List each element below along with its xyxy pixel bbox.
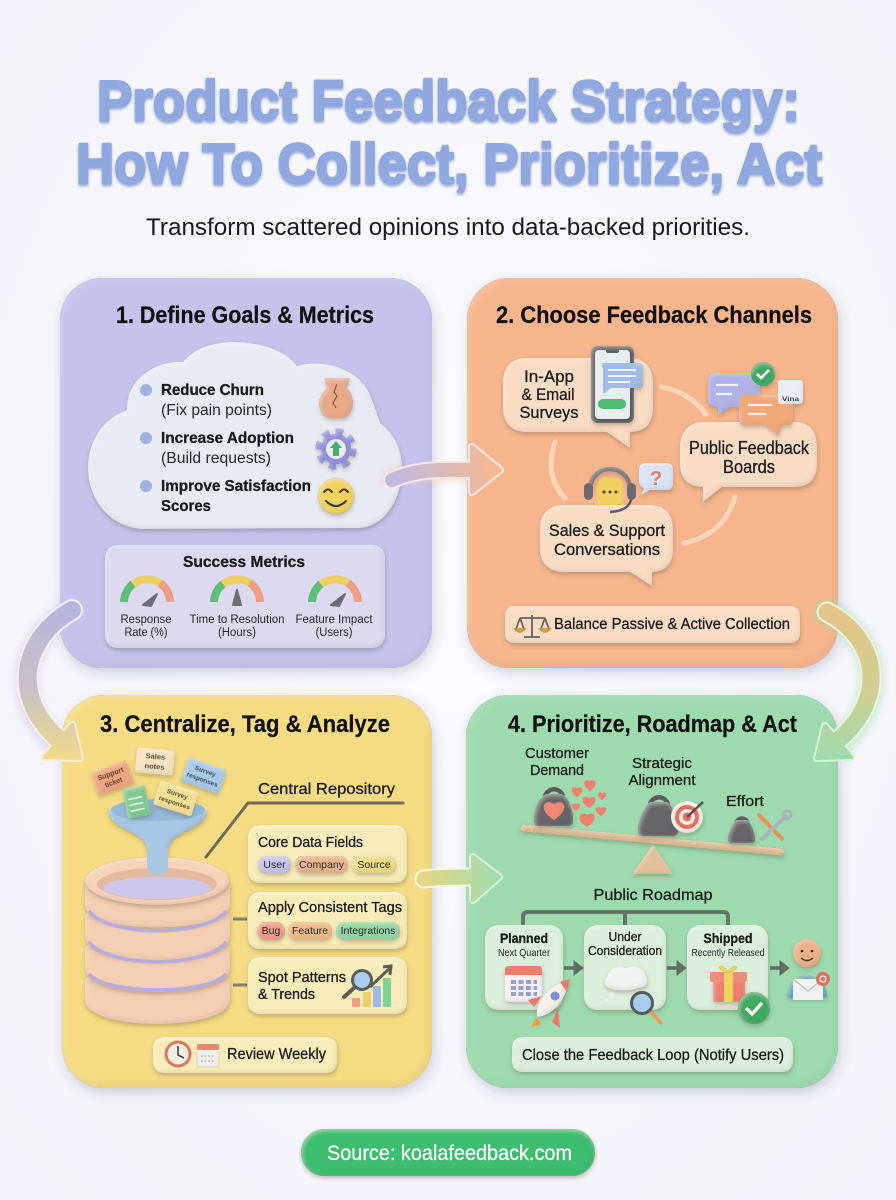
card: apply consistent tags: Integrations <box>341 925 395 937</box>
close the loop text: Close the Feedback Loop (Notify Users) <box>522 1047 784 1064</box>
bubble text: surveys: & Email <box>522 385 574 404</box>
bubble: sales and support conversations <box>540 505 673 586</box>
note: survey responses yellow: responses <box>158 795 191 812</box>
icon: question bubble: ? <box>650 468 662 490</box>
goal: improve satisfaction: Improve Satisfaction <box>161 478 311 495</box>
connector arcs <box>551 387 735 543</box>
bubble text: boards <box>689 438 810 477</box>
gauge: time to resolution <box>190 579 284 639</box>
roadmap card: planned: Planned <box>500 930 548 946</box>
card: core data fields: Company <box>299 859 345 871</box>
weight: effort with tools <box>728 811 791 843</box>
roadmap card: shipped <box>687 925 770 1024</box>
balance bar <box>505 606 800 643</box>
icon: question bubble <box>639 463 673 495</box>
card: apply consistent tags: Bug <box>262 925 280 937</box>
goal: increase adoption: Increase Adoption <box>161 430 294 447</box>
icon: board chat bubbles <box>708 362 803 435</box>
icon: user with envelope <box>787 939 830 1000</box>
arrow: channels to prioritize <box>817 612 871 758</box>
card: core data fields: Core Data Fields <box>258 835 363 851</box>
note: survey responses yellow <box>153 780 199 817</box>
bubble text: surveys <box>520 367 578 422</box>
success metrics heading: Success Metrics <box>183 554 305 571</box>
card: spot patterns and trends <box>233 957 407 1014</box>
gauge: feature impact: Feature Impact <box>296 614 373 626</box>
title <box>76 69 822 196</box>
roadmap card: under consideration: Consideration <box>588 943 662 958</box>
card: apply consistent tags: Apply Consistent Tags <box>258 900 402 916</box>
gauge: response rate <box>120 579 172 639</box>
panel 3 heading: 3. Centralize, Tag & Analyze <box>100 711 390 738</box>
gauge: time to resolution: (Hours) <box>218 627 256 639</box>
note: survey responses blue: Survey <box>194 765 217 779</box>
bubble text: surveys: In-App <box>524 367 574 386</box>
bubble text: sales: Sales & Support <box>549 521 665 540</box>
central repository label: Central Repository <box>258 781 395 798</box>
note: survey responses blue <box>181 757 227 794</box>
goal: reduce churn <box>140 382 272 419</box>
bubble text: surveys: Surveys <box>520 403 578 422</box>
icon: phone <box>591 346 643 423</box>
bubble text: sales: Conversations <box>554 540 660 559</box>
label: public roadmap: Public Roadmap <box>594 887 713 904</box>
gauge: feature impact: (Users) <box>316 627 353 639</box>
arrow: goals to channels <box>392 447 500 492</box>
thumbs-up card label: Vina <box>782 396 799 403</box>
title: How To Collect, Prioritize, Act <box>76 132 822 196</box>
panel 2: choose feedback channels <box>467 278 838 668</box>
goal: improve satisfaction: Scores <box>161 498 211 515</box>
roadmap arrows <box>564 961 789 975</box>
arrow: centralize to prioritize <box>424 857 499 900</box>
icon: rocket <box>528 979 570 1028</box>
roadmap card: shipped: Shipped <box>704 930 752 946</box>
note: sales notes <box>135 747 175 776</box>
goal: reduce churn: (Fix pain points) <box>161 402 272 419</box>
repository leader line <box>206 803 403 857</box>
roadmap card: planned <box>485 925 563 1010</box>
panel 3: centralize, tag and analyze <box>62 695 432 1088</box>
weight: customer demand with hearts <box>534 780 606 827</box>
weight: strategic alignment with target <box>638 797 703 836</box>
balance beam <box>524 828 781 873</box>
label: customer demand: Customer <box>525 745 589 762</box>
note: sales notes: notes <box>144 761 165 772</box>
review weekly pill: Review Weekly <box>227 1046 326 1063</box>
panel 4 heading: 4. Prioritize, Roadmap & Act <box>508 711 797 738</box>
goal: increase adoption <box>140 430 294 467</box>
note: survey responses yellow: Survey <box>166 788 189 801</box>
gauge: response rate: Rate (%) <box>124 627 168 639</box>
bubble text: boards: Public Feedback <box>689 438 810 458</box>
roadmap card: under consideration <box>584 925 666 1023</box>
card: apply consistent tags <box>233 892 407 949</box>
funnel <box>107 799 208 876</box>
database cylinder <box>85 848 230 1024</box>
label: strategic alignment: Strategic <box>632 755 692 772</box>
roadmap card: shipped: Recently Released <box>692 948 764 959</box>
bubble text: boards: Boards <box>723 457 775 477</box>
gauge: response rate: Response <box>120 614 172 626</box>
card: core data fields <box>248 825 407 883</box>
title: Product Feedback Strategy: <box>97 69 800 133</box>
roadmap card: planned: Next Quarter <box>498 948 551 959</box>
panel 1 heading: 1. Define Goals & Metrics <box>116 302 374 329</box>
roadmap card: under consideration: Under <box>608 929 642 944</box>
label: customer demand: Demand <box>530 762 584 779</box>
icon: headset with chat <box>584 469 636 512</box>
goals cloud <box>88 342 402 529</box>
panel 4: prioritize, roadmap and act <box>466 695 838 1088</box>
card: spot patterns and trends: Spot Patterns <box>258 970 346 986</box>
success metrics card <box>105 545 385 648</box>
card: core data fields: User <box>263 859 286 871</box>
review weekly pill <box>153 1037 337 1073</box>
source pill: Source: koalafeedback.com <box>327 1142 572 1165</box>
note: support ticket <box>90 760 134 796</box>
goal: increase adoption: (Build requests) <box>161 450 271 467</box>
note: green document <box>122 785 151 819</box>
gauge: feature impact <box>296 579 373 639</box>
card: core data fields: Source <box>357 859 391 871</box>
label: strategic alignment: Alignment <box>628 772 696 789</box>
icon: balance scale <box>515 615 550 637</box>
balance bar text: Balance Passive & Active Collection <box>554 616 790 633</box>
bubble: in-app and email surveys <box>503 358 653 448</box>
goal: reduce churn: Reduce Churn <box>161 382 264 399</box>
label: effort: Effort <box>726 793 765 810</box>
bubble: public feedback boards <box>680 422 817 502</box>
panel 2 heading: 2. Choose Feedback Channels <box>496 302 812 329</box>
card: apply consistent tags: Feature <box>292 925 328 937</box>
icon: gear with arrow <box>319 432 353 466</box>
roadmap bracket <box>523 912 728 925</box>
note: support ticket: Support <box>97 767 125 783</box>
note: sales notes: Sales <box>145 751 166 762</box>
subtitle: Transform scattered opinions into data-backed priorities. <box>146 214 750 241</box>
source pill <box>301 1129 595 1176</box>
arrow: goals to centralize <box>27 610 80 758</box>
icon: cracked vase <box>319 378 353 418</box>
bubble text: sales <box>549 521 665 559</box>
panel 1: define goals and metrics <box>60 278 432 668</box>
note: support ticket: ticket <box>104 777 124 790</box>
note: survey responses blue: responses <box>186 771 219 789</box>
close the loop bar <box>512 1037 793 1072</box>
goal: improve satisfaction <box>140 478 311 515</box>
gauge: time to resolution: Time to Resolution <box>190 614 284 626</box>
card: spot patterns and trends: & Trends <box>258 987 315 1003</box>
icon: smiley <box>318 478 354 514</box>
